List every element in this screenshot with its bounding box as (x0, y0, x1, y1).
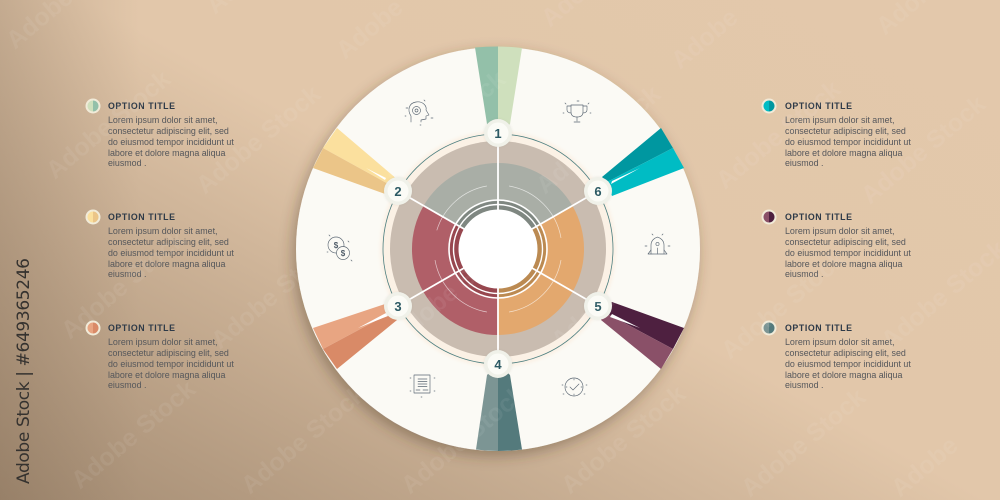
spokes (398, 133, 598, 364)
icon: head with gear (405, 100, 433, 125)
body text: do eiusmod tempor incididunt ut (108, 359, 234, 369)
heading: OPTION TITLE (785, 323, 852, 333)
body text: Lorem ipsum dolor sit amet, (785, 226, 894, 236)
icon: document (410, 375, 435, 397)
body text: eiusmod . (108, 158, 146, 168)
body text: consectetur adipiscing elit, sed (108, 237, 229, 247)
stock watermark text: Adobe Stock (711, 75, 846, 195)
thin arcs (435, 186, 561, 312)
body text: labore et dolore magna aliqua (785, 259, 902, 269)
icon: coins: $ (334, 241, 339, 250)
stock watermark text: Adobe Stock (856, 90, 991, 210)
panel: option left 2 (86, 210, 234, 279)
body text: labore et dolore magna aliqua (785, 148, 902, 158)
body text: do eiusmod tempor incididunt ut (785, 359, 911, 369)
body text: do eiusmod tempor incididunt ut (785, 137, 911, 147)
body text: do eiusmod tempor incididunt ut (108, 137, 234, 147)
body text: Lorem ipsum dolor sit amet, (785, 337, 894, 347)
body text: eiusmod . (785, 380, 823, 390)
stock watermark text: Adobe Stock (41, 65, 176, 185)
stock watermark text: Adobe Stock (236, 380, 371, 500)
node 5: 5 (594, 299, 602, 314)
node 2 (384, 177, 412, 205)
bullet (86, 210, 100, 224)
node 6: 6 (594, 184, 602, 199)
body text: Lorem ipsum dolor sit amet, (108, 226, 218, 236)
sector: red (412, 206, 498, 335)
bullet (762, 98, 776, 114)
node 4: 4 (494, 357, 502, 372)
heading: OPTION TITLE (785, 101, 852, 111)
sector: gray (424, 163, 572, 249)
node 1 (484, 119, 512, 147)
taupe ring (390, 141, 606, 357)
dark ring segments (450, 201, 546, 297)
panel: option right 1 (762, 98, 911, 168)
center disk (458, 210, 538, 288)
stock watermark text: Adobe Stock (556, 380, 691, 500)
stock watermark text: Adobe Stock (56, 225, 191, 345)
icon: coins (327, 235, 352, 261)
panel: option right 2 (762, 210, 911, 279)
body text: Lorem ipsum dolor sit amet, (785, 115, 894, 125)
body text: labore et dolore magna aliqua (108, 370, 225, 380)
stock watermark text: Adobe Stock (386, 230, 521, 350)
stock watermark text: Adobe Stock (531, 80, 666, 200)
node 2: 2 (394, 184, 402, 199)
panel: option left 3 (86, 320, 234, 390)
heading: OPTION TITLE (108, 101, 175, 111)
icon: rocket (645, 234, 670, 254)
panel: option right 3 (762, 320, 911, 390)
stock watermark text: Adobe (666, 3, 744, 75)
bullet (762, 320, 776, 336)
body text: Lorem ipsum dolor sit amet, (108, 337, 218, 347)
side credit: Adobe Stock | #649365246 (14, 258, 34, 484)
body text: consectetur adipiscing elit, sed (785, 126, 906, 136)
bullet (86, 98, 100, 114)
node 3: 3 (394, 299, 402, 314)
node 5 (584, 292, 612, 320)
inner halo (380, 131, 616, 367)
ring: white outer (449, 200, 547, 298)
bullet (762, 210, 776, 224)
stock watermark text: Adobe Stock (716, 245, 851, 365)
body text: consectetur adipiscing elit, sed (108, 348, 229, 358)
wedge 5: plum (601, 302, 684, 369)
wedge 2: yellow (313, 128, 398, 195)
icon: trophy (563, 101, 591, 122)
node 1: 1 (494, 126, 502, 141)
wedge 6: teal (602, 128, 684, 196)
body text: Lorem ipsum dolor sit amet, (108, 115, 218, 125)
body text: do eiusmod tempor incididunt ut (108, 248, 234, 258)
wheel (296, 46, 700, 451)
stock watermark text: Adobe Stock (376, 65, 511, 185)
body text: do eiusmod tempor incididunt ut (785, 248, 911, 258)
body text: labore et dolore magna aliqua (108, 148, 225, 158)
body text: labore et dolore magna aliqua (785, 370, 902, 380)
body text: eiusmod . (785, 158, 823, 168)
body text: consectetur adipiscing elit, sed (785, 348, 906, 358)
node 4 (484, 350, 512, 378)
body text: labore et dolore magna aliqua (108, 259, 225, 269)
wedge 4: slate (476, 364, 522, 451)
stock watermark text: Adobe Stock (396, 380, 531, 500)
body text: eiusmod . (108, 269, 146, 279)
stock watermark text: Adobe Stock (546, 235, 681, 355)
heading: OPTION TITLE (108, 212, 175, 222)
ring: white inner (454, 204, 542, 294)
body text: consectetur adipiscing elit, sed (108, 126, 229, 136)
teal ring (383, 134, 613, 364)
wedge 3: orange (313, 303, 397, 369)
wedge 1: green (475, 46, 522, 133)
stock watermark text: Adobe Stock (206, 235, 341, 355)
body text: consectetur adipiscing elit, sed (785, 237, 906, 247)
disk: outer cream circle (296, 47, 700, 451)
sector: orange (498, 206, 584, 335)
node 6 (584, 177, 612, 205)
icon: coins: $ (341, 249, 346, 258)
heading: OPTION TITLE (785, 212, 852, 222)
body text: eiusmod . (785, 269, 823, 279)
stock watermark text: Adobe Stock (66, 375, 201, 495)
bullet (86, 320, 100, 336)
body text: eiusmod . (108, 380, 146, 390)
stock watermark text: Adobe Stock (736, 383, 871, 500)
panel: option left 1 (86, 98, 234, 168)
stock watermark text: Adobe Stock (191, 80, 326, 200)
heading: OPTION TITLE (108, 323, 175, 333)
node 3 (384, 292, 412, 320)
icon: clock (562, 378, 587, 396)
